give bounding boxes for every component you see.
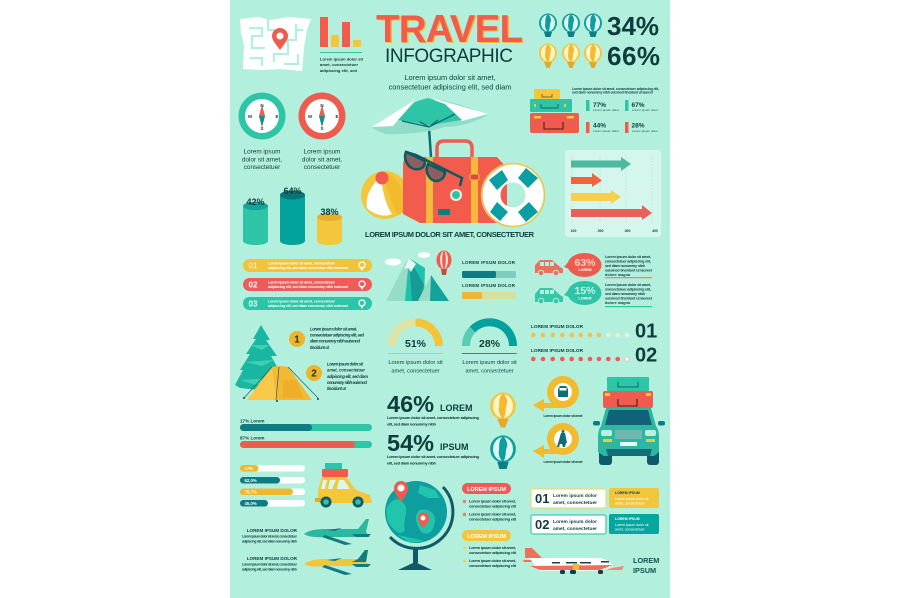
plane caption 1: adipiscing elit, sed diam nonummy nibh: [242, 540, 297, 544]
note box: yellow: [609, 488, 659, 508]
illustration: teal plane: [304, 519, 371, 545]
illustration: sunglasses: [405, 152, 462, 186]
stats with suitcases: Lorem ipsum dolor sit amet, consectetuer adipiscing elit,: [572, 87, 659, 91]
compass: teal: [238, 92, 286, 140]
gauge: 51%: amet, consectetuer: [391, 368, 440, 374]
illustration: life ring: [482, 164, 544, 226]
note box: teal: [609, 514, 659, 534]
gauge: 28%: Lorem ipsum dolor sit: [462, 360, 517, 366]
numbered point 2: tincidunt ut: [327, 386, 347, 391]
compass: teal: E: [275, 114, 279, 119]
illustration: car with luggage: [593, 377, 665, 465]
numbered point 2: 2: [311, 368, 317, 380]
label: lorem ipsum: LOREM: [633, 556, 659, 565]
car stat: red: [535, 253, 653, 278]
compass captions: [242, 148, 342, 171]
icon: suitcase stack: [530, 89, 579, 133]
dot rating 02: 02: [635, 344, 657, 366]
ribbon list: 01: [249, 262, 258, 270]
numbered point 1: consectetuer adipiscing elit, sed: [310, 332, 364, 338]
balloon percentages: [539, 11, 660, 71]
cylinder chart: 64%: [283, 186, 302, 196]
badge: traveller route: [533, 423, 583, 464]
car stat: red: consectetuer adipiscing elit,: [605, 260, 651, 264]
numbered box 02: amet, consectetuer: [553, 526, 597, 532]
illustration: red and white airliner: [523, 548, 624, 574]
arrow bar chart: 400: [652, 229, 658, 233]
icon: bar chart with caption: Lorem ipsum dolor sit: [320, 56, 364, 62]
stats with suitcases: Lorem ipsum dolor: [632, 108, 658, 112]
mini progress bars: 17%: [244, 466, 253, 471]
stat: 46%: [387, 391, 480, 426]
list: red heading: consectetuer adipiscing elit: [469, 516, 517, 522]
numbered point 1: Lorem ipsum dolor sit amet,: [310, 326, 357, 332]
gauge: 51%: [388, 322, 443, 374]
progress bars: lorem: [240, 418, 372, 448]
mini progress bars: 45,0%: [244, 501, 257, 506]
cylinder chart: 38%: [320, 207, 339, 217]
plane caption 2: [242, 556, 298, 572]
stat: 46%: elit, sed diam nonummy nibh: [387, 422, 437, 426]
title: INFOGRAPHIC: [385, 46, 513, 67]
list: yellow heading: consectetuer adipiscing elit: [469, 550, 517, 555]
numbered box 02: Lorem ipsum dolor: [553, 519, 597, 525]
label: lorem ipsum: [633, 556, 659, 575]
numbered box 01: [531, 489, 606, 508]
stats with suitcases: Lorem ipsum dolor: [632, 129, 658, 133]
stat: 54%: IPSUM: [440, 442, 469, 452]
note box: teal: LOREM IPSUM: [615, 517, 640, 521]
stats with suitcases: [572, 87, 659, 133]
cylinder chart: [243, 186, 342, 245]
car stat: red: sed diam nonummy nibh: [605, 264, 646, 268]
note box: teal: amet, consectetuer: [615, 528, 646, 532]
illustration: yellow plane: [304, 550, 371, 575]
stats with suitcases: sed diam nonummy nibh euismod tincidunt ut laoreet: [572, 90, 654, 94]
plane caption 2: LOREM IPSUM DOLOR: [247, 556, 298, 561]
compass captions: dolor sit amet,: [302, 156, 342, 164]
compass captions: consectetuer: [304, 164, 341, 171]
numbered box 01: 01: [535, 491, 549, 506]
numbered box 01: amet, consectetuer: [553, 500, 597, 506]
illustration: yellow car: [315, 463, 372, 508]
numbered point 1: [289, 326, 364, 350]
background panel: [230, 0, 670, 598]
title: TRAVEL: [376, 8, 523, 51]
subtitle: [389, 73, 511, 92]
plane caption 2: Lorem ipsum dolor sit amet, consectetuer: [242, 562, 298, 566]
subtitle: Lorem ipsum dolor sit amet,: [404, 73, 496, 82]
numbered point 2: Lorem ipsum dolor sit: [327, 362, 364, 366]
car stat: red: 63%: [574, 257, 596, 269]
gauge: 51%: Lorem ipsum dolor sit: [388, 360, 443, 366]
stat: 54%: 54%: [387, 430, 434, 456]
numbered box 02: [531, 515, 606, 534]
car stat: teal: dolore magna: [605, 301, 631, 305]
compass captions: consectetuer: [244, 164, 281, 171]
stat: 54%: elit, sed diam nonummy nibh: [387, 460, 437, 466]
ribbon list: [243, 259, 372, 310]
numbered point 2: [306, 362, 368, 391]
dot rating 02: [531, 344, 657, 366]
stats with suitcases: 77%: [593, 102, 606, 109]
dot rating 02: LOREM IPSUM DOLOR: [531, 348, 584, 353]
compass: red: E: [335, 114, 339, 119]
mini progress bars: 75,7%: [244, 490, 257, 494]
mini progress bars: 62,0%: [244, 478, 257, 483]
caption: illustration: LOREM IPSUM DOLOR SIT AMET, CONSECTETUER: [365, 230, 535, 239]
illustration: beach ball: [361, 171, 409, 219]
progress bars: lorem: 17% Lorem: [240, 418, 265, 424]
list: yellow heading: [462, 530, 517, 568]
icon: bar chart with caption: [320, 17, 364, 73]
stat: 46%: 46%: [387, 391, 434, 417]
numbered box 02: 02: [535, 517, 549, 532]
ribbon list: Lorem ipsum dolor sit amet, consectetuer: [268, 300, 336, 304]
title: TRAVEL: [378, 9, 524, 52]
arrow bar chart: [565, 150, 661, 237]
ribbon list: 03: [249, 300, 258, 308]
car stat: red: dolore magna: [605, 273, 631, 277]
compass captions: Lorem ipsum: [244, 148, 280, 156]
numbered point 2: nonummy nibh euismod: [327, 380, 367, 385]
progress labels and bars: LOREM IPSUM DOLOR: [462, 283, 516, 288]
list: red heading: Lorem ipsum dolor sit amet,: [469, 512, 516, 516]
list: yellow heading: LOREM IPSUM: [467, 534, 506, 540]
note box: yellow: amet, consectetuer: [615, 502, 646, 506]
progress labels and bars: LOREM IPSUM DOLOR: [462, 260, 516, 265]
list: red heading: consectetuer adipiscing elit: [469, 504, 517, 508]
stats with suitcases: Lorem ipsum dolor: [593, 108, 619, 112]
car stat: teal: consectetuer adipiscing elit,: [605, 288, 651, 292]
stats with suitcases: 28%: [632, 122, 645, 130]
car stat: teal: sed diam nonummy nibh: [605, 292, 646, 296]
numbered point 2: amet, consectetuer: [327, 368, 365, 372]
car stat: teal: euismod tincidunt ut laoreet: [605, 296, 653, 300]
badge: traveller route: Lorem ipsum dolor sit amet: [544, 460, 583, 464]
progress labels and bars: [462, 260, 516, 299]
compass: teal: N: [260, 103, 264, 108]
compass: red: W: [308, 114, 313, 119]
car stat: red: LOREM: [579, 268, 591, 272]
ribbon list: Lorem ipsum dolor sit amet, consectetuer: [268, 280, 336, 284]
stat: 46%: LOREM: [440, 403, 472, 413]
ribbon list: adipiscing elit, sed diam nonummy nibh euismod: [268, 304, 348, 308]
illustration: beach umbrella: [372, 98, 488, 157]
car stat: teal: LOREM: [579, 296, 591, 300]
car stat: teal: [535, 281, 653, 307]
compass captions: Lorem ipsum: [304, 148, 340, 156]
gauge: 28%: 28%: [479, 338, 501, 350]
compass: teal: S: [260, 126, 264, 131]
plane caption 2: adipiscing elit, sed diam nonummy nibh: [242, 568, 297, 572]
mini progress bars: [240, 465, 305, 506]
badge: car route: Lorem ipsum dolor sit amet: [544, 414, 583, 418]
plane caption 1: [242, 528, 298, 544]
list: yellow heading: Lorem ipsum dolor sit amet,: [469, 558, 516, 563]
car stat: teal: 15%: [574, 285, 596, 297]
compass: teal: W: [248, 114, 253, 119]
plane caption 1: Lorem ipsum dolor sit amet, consectetuer: [242, 534, 298, 538]
stats with suitcases: 44%: [593, 122, 606, 130]
list: red heading: Lorem ipsum dolor sit amet,: [469, 498, 516, 504]
illustration: globe on stand: [385, 481, 453, 570]
stat: 46%: Lorem ipsum dolor sit amet, consectetuer adipiscing: [387, 415, 480, 420]
icon: large yellow balloon: [490, 392, 516, 427]
note box: teal: Lorem ipsum dolor sit: [615, 523, 648, 527]
arrow bar chart: 200: [598, 229, 603, 233]
subtitle: consectetuer adipiscing elit, sed diam: [389, 82, 511, 92]
icon: large teal balloon: [490, 435, 516, 469]
compass captions: dolor sit amet,: [242, 156, 282, 164]
icon: bar chart with caption: adipiscing elit, sed: [320, 68, 358, 73]
gauge: 51%: 51%: [405, 338, 427, 350]
balloon percentages: 66%: [607, 41, 660, 71]
compass: red: N: [320, 103, 324, 108]
arrow bar chart: 300: [625, 229, 630, 233]
car stat: red: euismod tincidunt ut laoreet: [605, 268, 653, 272]
label: lorem ipsum: IPSUM: [633, 566, 656, 575]
ribbon list: adipiscing elit, sed diam nonummy nibh euismod: [268, 266, 348, 270]
numbered point 1: tincidunt ut: [310, 345, 330, 350]
balloon percentages: 34%: [607, 11, 659, 41]
compass: red: S: [320, 126, 324, 131]
stat: 54%: [387, 430, 480, 466]
dot rating 01: 01: [635, 320, 657, 342]
gauge: 28%: [462, 322, 517, 374]
ribbon list: adipiscing elit, sed diam nonummy nibh euismod: [268, 285, 348, 289]
stats with suitcases: 67%: [632, 102, 645, 109]
progress bars: lorem: 87% Lorem: [240, 436, 265, 440]
illustration: tree and tent: [235, 325, 319, 402]
dot rating 01: [531, 320, 657, 342]
numbered point 1: diam nonummy nibh euismod: [310, 338, 360, 344]
compass: red: [298, 92, 346, 140]
numbered point 1: 1: [294, 334, 300, 346]
plane caption 1: LOREM IPSUM DOLOR: [247, 528, 298, 533]
list: red heading: LOREM IPSUM: [467, 487, 506, 493]
icon: city map with pin: [240, 17, 311, 71]
note box: yellow: Lorem ipsum dolor sit: [615, 497, 648, 501]
numbered box 01: Lorem ipsum dolor: [553, 493, 597, 499]
ribbon list: 02: [249, 280, 258, 290]
list: yellow heading: consectetuer adipiscing elit: [469, 563, 517, 568]
arrow bar chart: 100: [571, 229, 576, 233]
badge: car route: [533, 376, 583, 418]
stat: 54%: Lorem ipsum dolor sit amet, consectetuer adipiscing: [387, 454, 480, 459]
icon: bar chart with caption: amet, consectetuer: [320, 62, 358, 67]
note box: yellow: LOREM IPSUM: [615, 491, 640, 495]
numbered point 2: adipiscing elit, sed diam: [327, 374, 368, 379]
stats with suitcases: Lorem ipsum dolor: [593, 129, 619, 133]
gauge: 28%: amet, consectetuer: [465, 368, 514, 374]
car stat: red: Lorem ipsum dolor sit amet,: [605, 255, 651, 259]
illustration: red suitcase: [403, 141, 507, 223]
illustration: mountains, clouds and balloon: [385, 250, 452, 301]
ribbon list: Lorem ipsum dolor sit amet, consectetuer: [268, 262, 336, 266]
list: red heading: [462, 483, 517, 522]
cylinder chart: 42%: [246, 197, 265, 207]
dot rating 01: LOREM IPSUM DOLOR: [531, 324, 584, 329]
list: yellow heading: Lorem ipsum dolor sit amet,: [469, 545, 516, 550]
car stat: teal: Lorem ipsum dolor sit amet,: [605, 283, 651, 287]
